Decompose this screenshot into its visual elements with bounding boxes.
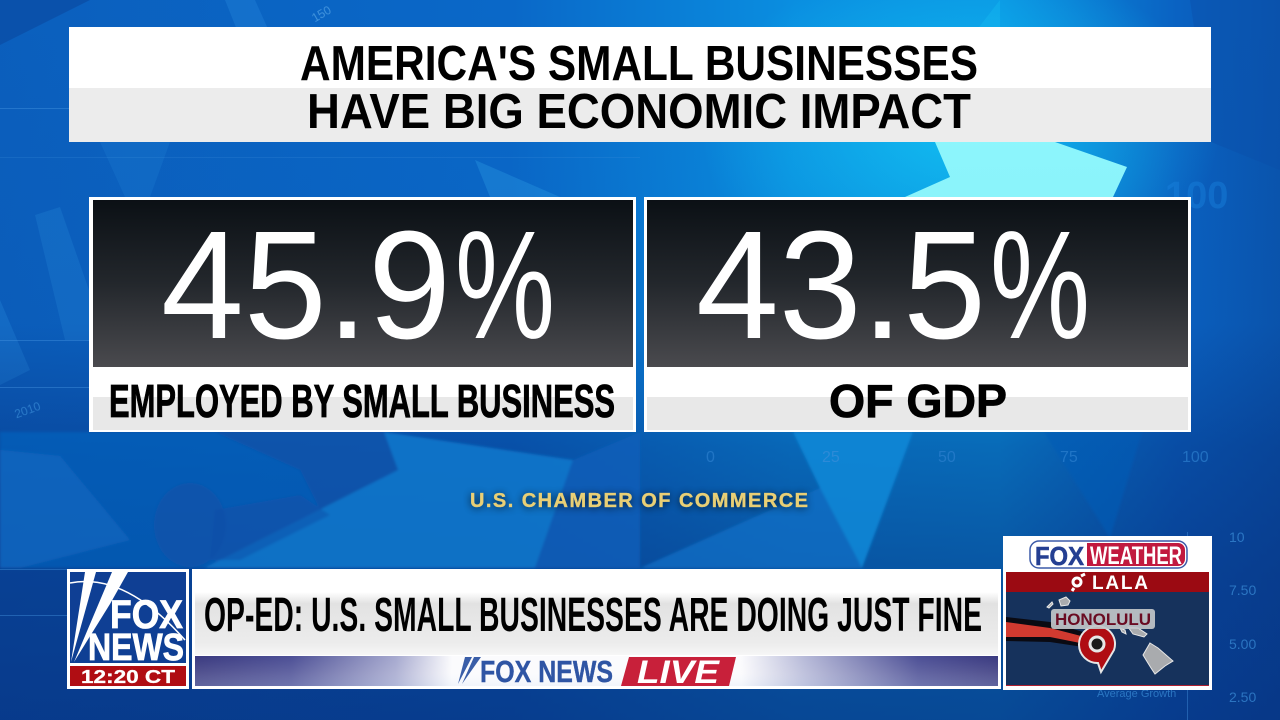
storm track [1006,617,1090,648]
Fox Weather logo: FOX [1035,541,1085,571]
chart labels: 5.00 [1229,636,1256,652]
chart labels: 100 [1165,175,1228,217]
title text [300,37,978,139]
panel: of GDP [644,197,1191,432]
stat: 45.9%: 45.9 [161,199,451,371]
chart labels: 2010 [13,399,43,421]
Fox Weather logo [1030,541,1187,571]
chart labels: 7.50 [1229,582,1256,598]
Fox News Live logo: FOX NEWS [480,654,613,689]
logo text [88,593,184,669]
chart labels: 100 [1182,449,1209,466]
light and dark facets, lower area [0,432,1142,568]
chart labels: 25 [822,449,840,466]
storm name bar [1006,572,1209,594]
Fox News Live logo [458,654,736,690]
chart labels: 150 [309,3,334,25]
city label: HONOLULU [1055,610,1151,629]
icon: storm symbol [1072,574,1085,591]
chart labels: Average Growth [1097,688,1176,700]
chart labels: 10 [1229,529,1245,545]
chart labels: 2.50 [1229,689,1256,705]
grid lines [0,108,1188,720]
stat: 43.5%: % [990,199,1090,371]
stat: 43.5%: 43.5 [696,199,986,371]
chart labels: 50 [938,449,956,466]
icon: small searchlight [458,657,481,684]
clock: 12:20 CT [81,667,175,687]
chart labels: 75 [1060,449,1078,466]
source credit: U.S. CHAMBER OF COMMERCE [470,490,808,512]
title text: AMERICA'S SMALL BUSINESSES [300,37,978,91]
logo text: NEWS [88,627,184,669]
chart labels: 0 [706,449,715,466]
Fox Weather inset [1003,536,1212,690]
logo text: FOX [110,593,183,637]
lower third headline bar [192,569,1001,690]
label: of GDP: OF GDP [829,375,1007,427]
upper left streaks [0,0,90,45]
title banner [69,27,1211,142]
label: employed by small business: EMPLOYED BY SMALL BUSINESS [109,375,615,427]
Fox Weather logo: WEATHER [1090,542,1182,570]
icon: searchlight beams [70,572,185,662]
storm name bar: LALA [1092,573,1148,594]
Fox News logo with clock [67,569,189,689]
map silhouettes [154,483,226,567]
cyan highlight [905,142,1127,197]
panel: employed by small business [89,197,636,432]
title text: HAVE BIG ECONOMIC IMPACT [307,85,971,139]
storm track map [1006,592,1209,686]
islands [1047,597,1173,674]
icon: hurricane symbol [1079,626,1115,672]
Fox News Live logo: LIVE [637,654,721,690]
stat: 45.9%: % [455,199,555,371]
